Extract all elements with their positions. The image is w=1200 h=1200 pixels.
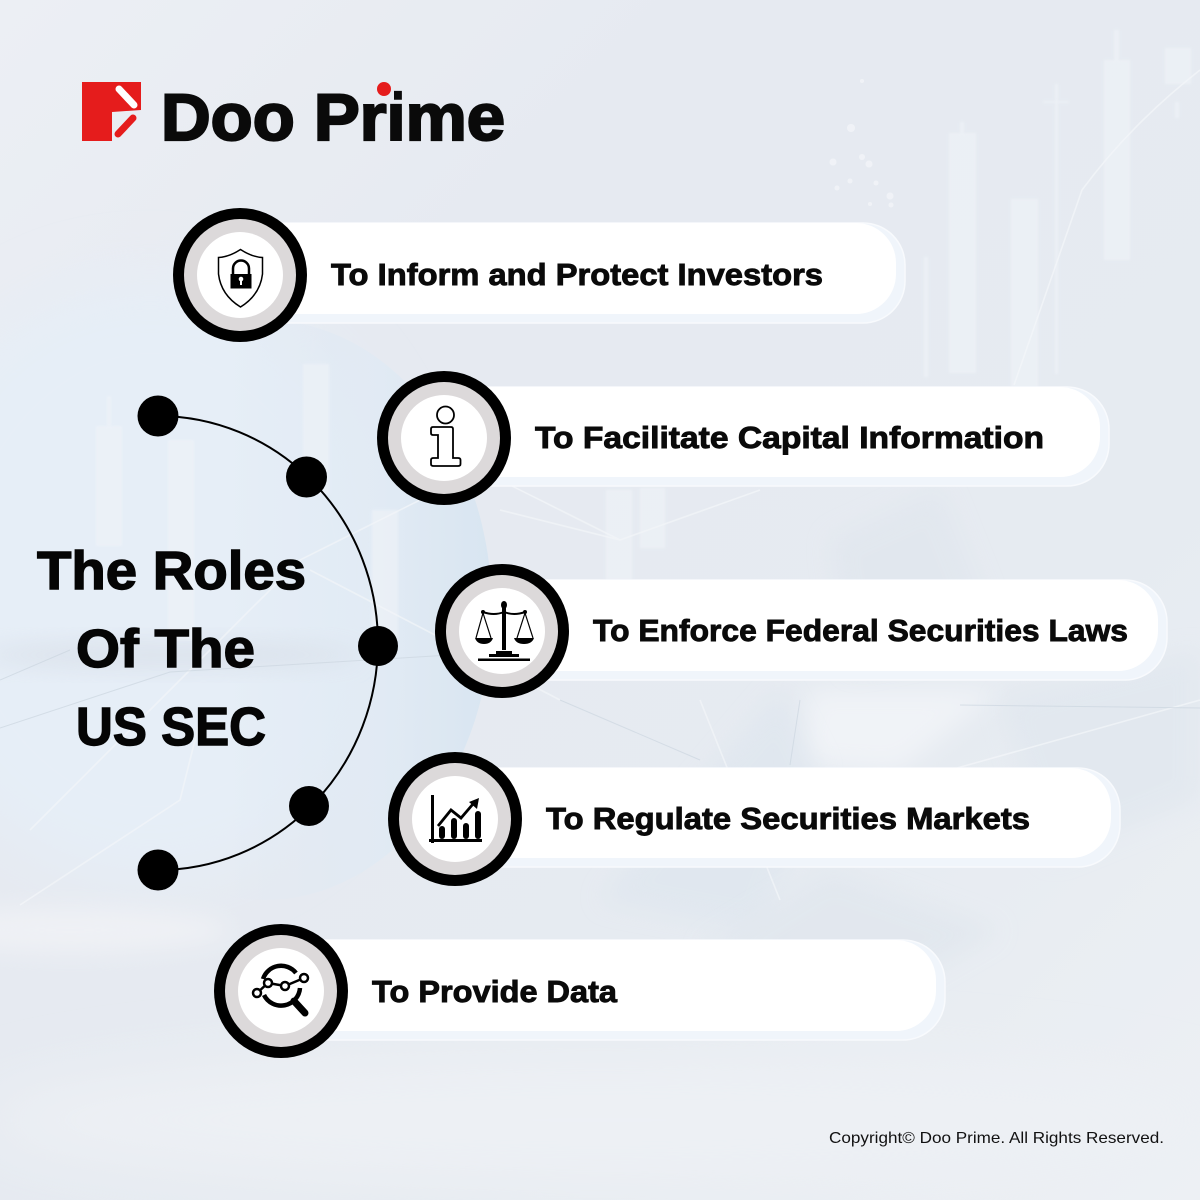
- icon ring: [388, 752, 522, 886]
- logo: [82, 80, 505, 154]
- label: To Inform and Protect Investors: [331, 257, 823, 292]
- logo wordmark: Doo Prime: [161, 80, 505, 154]
- label: To Enforce Federal Securities Laws: [593, 613, 1128, 648]
- icon ring: [435, 564, 569, 698]
- light lines: [20, 70, 1200, 905]
- pill: [281, 940, 945, 1040]
- candles: [96, 30, 1191, 640]
- copyright: Copyright© Doo Prime. All Rights Reserved.: [829, 1130, 1164, 1147]
- pill: [444, 387, 1109, 486]
- item 5: provide data: [214, 924, 945, 1058]
- pill: [240, 223, 905, 323]
- label: To Provide Data: [372, 974, 618, 1009]
- icon: magnifier with data trend: [253, 966, 308, 1013]
- icon: information: [431, 406, 460, 466]
- label: To Regulate Securities Markets: [546, 801, 1030, 836]
- icon: rising bar chart: [429, 795, 482, 843]
- item 4: regulate securities markets: [388, 752, 1120, 886]
- icon ring: [377, 371, 511, 505]
- icon ring: [214, 924, 348, 1058]
- connector arc with dots: [138, 396, 398, 890]
- icon: shield with padlock: [218, 250, 262, 307]
- title: The Roles: [37, 541, 306, 601]
- item 2: facilitate capital information: [377, 371, 1109, 505]
- icon ring: [173, 208, 307, 342]
- label: To Facilitate Capital Information: [535, 420, 1044, 455]
- icon: scales of justice: [475, 601, 534, 661]
- item 1: inform and protect investors: [173, 208, 905, 342]
- pill: [502, 580, 1167, 680]
- title: Of The: [76, 619, 255, 679]
- title: [37, 541, 306, 757]
- item 3: enforce federal securities laws: [435, 564, 1167, 698]
- icon: Doo Prime logo mark: [82, 82, 141, 141]
- pill: [455, 768, 1120, 867]
- title: US SEC: [76, 697, 266, 757]
